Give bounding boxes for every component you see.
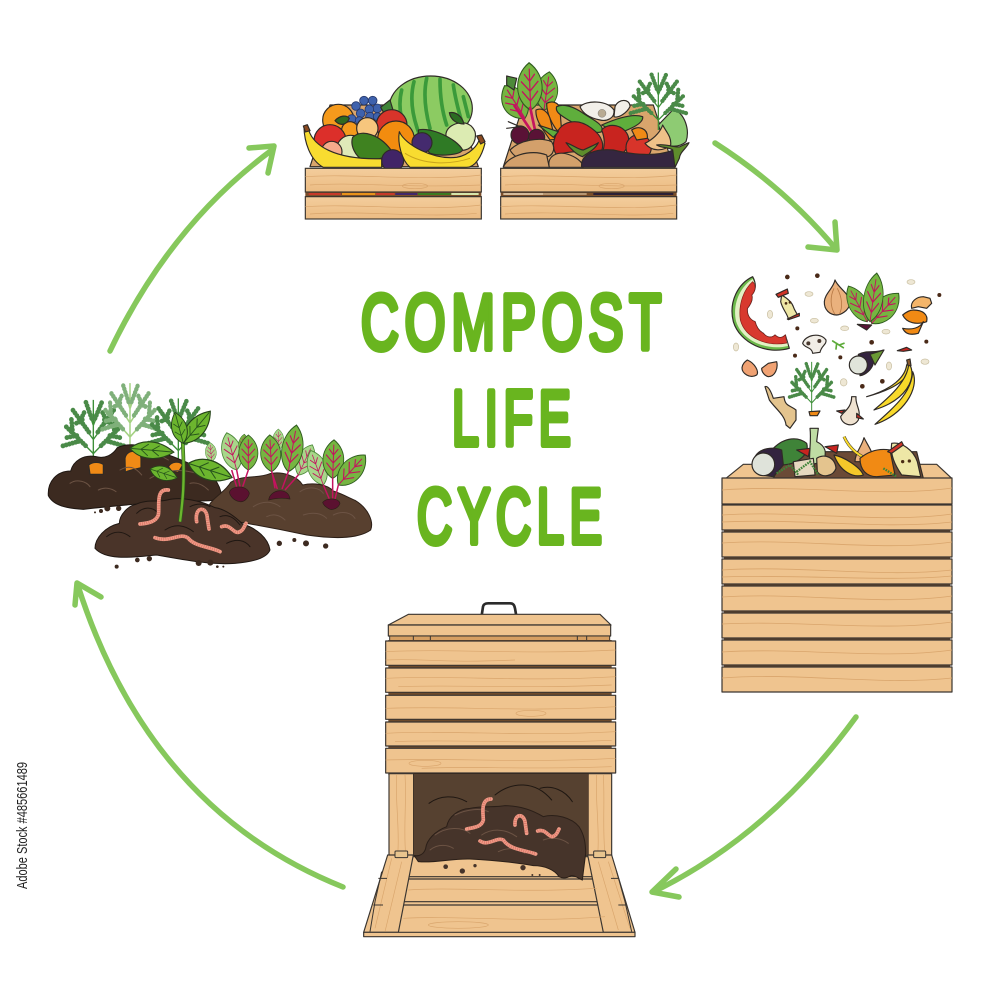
- vegetable crate: [494, 62, 689, 219]
- arrow: harvest to scraps: [715, 143, 837, 250]
- onion: [645, 125, 671, 150]
- arrow: garden to harvest: [110, 146, 274, 351]
- carrots: [547, 102, 562, 132]
- stock image id, vertical text: Adobe Stock #485661489: [15, 762, 31, 889]
- closed composter with open door: [364, 603, 635, 937]
- arrow: composter to garden: [75, 583, 343, 887]
- door: [364, 855, 635, 937]
- mushroom: [803, 335, 826, 353]
- grapes: [347, 96, 382, 125]
- title: [361, 280, 667, 560]
- cabbage: [658, 109, 687, 146]
- garden with plants, soil and worms: [48, 383, 373, 569]
- banana peel: [867, 359, 914, 424]
- soil crumbs: [94, 505, 328, 569]
- carrot mound: [48, 445, 222, 509]
- dark gaps: [388, 640, 612, 775]
- potatoes: [510, 139, 554, 160]
- eggplant: [582, 150, 675, 167]
- watermelon rind: [732, 277, 789, 350]
- hinges: [395, 851, 606, 858]
- title: COMPOST: [361, 280, 667, 367]
- onion: [824, 280, 850, 315]
- seeds: [785, 273, 941, 389]
- carrot top scrap: [788, 362, 835, 416]
- beet greens: [494, 62, 560, 132]
- compost interior: [414, 774, 588, 860]
- lid handle: [481, 603, 517, 620]
- front mound: [95, 499, 270, 564]
- plum: [382, 150, 404, 172]
- watermelon: [389, 76, 472, 141]
- bananas: [304, 126, 382, 167]
- compost heap: [414, 806, 586, 880]
- lid: [388, 614, 611, 641]
- carrot tops: [61, 383, 209, 465]
- beet greens: [204, 423, 373, 492]
- fruit crate planks: [305, 192, 481, 197]
- arrow: scraps to composter: [652, 717, 856, 897]
- title: CYCLE: [417, 472, 608, 560]
- carrots: [89, 451, 183, 474]
- bin planks: [724, 500, 950, 692]
- seedling: [129, 406, 235, 522]
- title: LIFE: [452, 374, 576, 462]
- side posts: [389, 774, 612, 855]
- worms: [467, 799, 559, 854]
- spilled crumbs: [443, 864, 541, 876]
- food scraps falling into open compost bin: [726, 272, 952, 478]
- apple core: [776, 289, 799, 320]
- crates of fruit and vegetables: [303, 62, 689, 219]
- open-top compost bin: [722, 478, 952, 692]
- egg shells: [742, 360, 777, 377]
- carrot top: [629, 72, 687, 130]
- beetroot: [511, 126, 529, 144]
- box planks: [386, 641, 616, 773]
- radish scrap: [837, 397, 863, 425]
- chili: [897, 347, 912, 351]
- cucumber: [556, 105, 602, 132]
- vegetable crate planks: [501, 192, 677, 197]
- orange peel: [903, 297, 932, 334]
- chard: [840, 272, 906, 330]
- bell peppers: [554, 122, 603, 155]
- earthworms: [140, 490, 246, 552]
- bin back rim: [726, 464, 952, 478]
- beetroots and stems: [229, 470, 340, 509]
- eggplant slice: [849, 350, 884, 376]
- potato peel: [765, 386, 796, 428]
- beet mound: [208, 473, 372, 538]
- mushrooms: [580, 100, 630, 120]
- fruit crate: [303, 76, 485, 219]
- herb sprig: [833, 341, 844, 349]
- back soil lines: [429, 785, 572, 803]
- scrap pile: [752, 428, 923, 478]
